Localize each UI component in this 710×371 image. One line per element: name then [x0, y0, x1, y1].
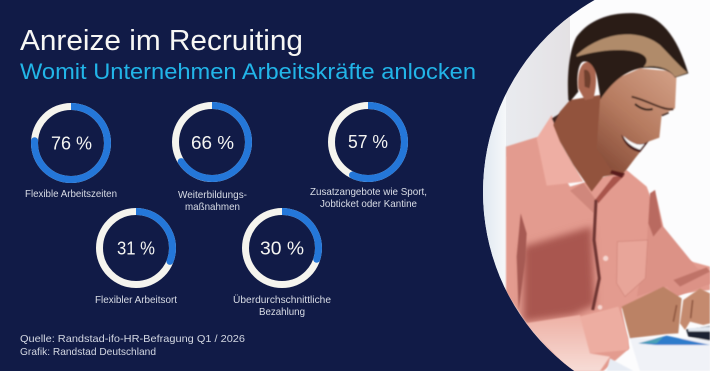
donut: 31 % flexible workplace: Flexibler Arbeitsort [95, 294, 177, 306]
torso shadow (photo detail) [523, 227, 595, 322]
donut: 57 % additional offers: 57 % [348, 131, 388, 152]
donut: 30 % above-average pay: Überdurchschnittliche [233, 294, 331, 306]
donut: 66 % further training: maßnahmen [185, 201, 240, 213]
donut: 66 % further training: 66 % [191, 132, 234, 153]
donut: 76 % flexible working hours [25, 106, 117, 200]
donut: 30 % above-average pay: Bezahlung [259, 306, 305, 318]
donut: 30 % above-average pay: 30 % [260, 238, 304, 258]
donut: 66 % further training [176, 106, 248, 213]
source note [20, 333, 245, 358]
donut: 31 % flexible workplace: 31 % [117, 238, 155, 258]
donut: 57 % additional offers: Zusatzangebote wie Sport, [310, 186, 427, 198]
donut: 57 % additional offers: Jobticket oder Kantine [320, 198, 417, 210]
title: Anreize im Recruiting [20, 25, 303, 57]
source note: Grafik: Randstad Deutschland [20, 346, 156, 358]
source note: Quelle: Randstad-ifo-HR-Befragung Q1 / 2026 [20, 333, 245, 345]
donut: 76 % flexible working hours: 76 % [51, 132, 92, 154]
donut: 66 % further training: Weiterbildungs- [178, 189, 247, 201]
donut: 30 % above-average pay [233, 212, 331, 318]
donut: 76 % flexible working hours: Flexible Arbeitszeiten [25, 188, 117, 200]
donut: 57 % additional offers [310, 106, 427, 210]
photo: smiling man in circular crop [470, 0, 710, 371]
subtitle: Womit Unternehmen Arbeitskräfte anlocken [20, 59, 476, 84]
donut: 31 % flexible workplace [95, 212, 177, 306]
